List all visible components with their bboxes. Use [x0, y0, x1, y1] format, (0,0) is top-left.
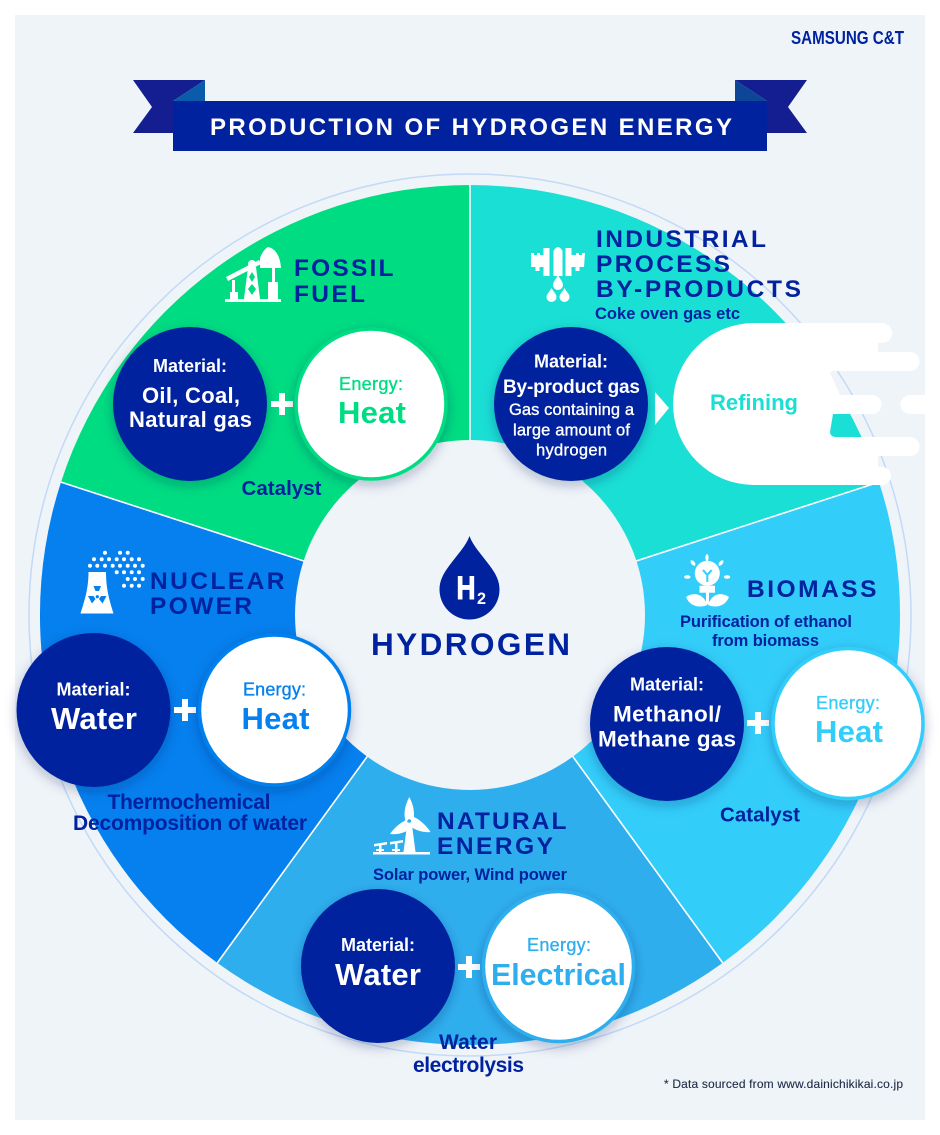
- label: catalyst: Catalyst: [720, 804, 800, 826]
- icon: oil pump: [225, 247, 281, 302]
- panel: natural energy sector: [217, 615, 723, 1045]
- panel: natural energy content: [301, 797, 634, 1077]
- heading: biomass: BIOMASS: [747, 576, 876, 603]
- material circle: Material:: [534, 352, 608, 372]
- icon: bulb and leaves: [684, 554, 730, 606]
- panel: natural energy content: ENERGY: [437, 833, 553, 860]
- heading: industrial process by-products: INDUSTRIAL: [596, 226, 766, 253]
- energy circle: Energy:: [339, 374, 403, 394]
- label: thermochemical decomposition: [73, 791, 307, 835]
- subtext: coke oven gas: Coke oven gas etc: [595, 305, 740, 323]
- label: water electrolysis: Water: [439, 1031, 497, 1054]
- material circle: Methanol/: [613, 702, 722, 726]
- source note: * Data sourced from www.dainichikikai.co.jp: [664, 1077, 903, 1091]
- heading: industrial process by-products: PROCESS: [596, 251, 730, 278]
- material circle: Material:: [153, 356, 227, 376]
- refining shape: [673, 323, 925, 485]
- icon: wind turbine: [373, 797, 430, 854]
- energy circle: Heat: [242, 701, 310, 736]
- material circle: [301, 889, 455, 1043]
- material circle: large amount of: [513, 422, 630, 440]
- subtext: purification: from biomass: [712, 632, 819, 650]
- material circle: By-product gas: [503, 377, 640, 398]
- material circle: Material:: [56, 680, 130, 700]
- icon: pipes and drops: [531, 247, 585, 302]
- subtext: purification: Purification of ethanol: [680, 613, 852, 631]
- panel: nuclear content: POWER: [150, 593, 252, 620]
- heading: natural energy: NATURAL: [437, 808, 567, 835]
- plus sign: [458, 956, 480, 978]
- plus sign: [271, 393, 293, 415]
- heading: nuclear power: NUCLEAR: [150, 568, 285, 595]
- title banner: [133, 80, 807, 151]
- panel: fossil fuel content: FUEL: [294, 281, 365, 308]
- heading: industrial process by-products: [596, 226, 801, 303]
- heading: fossil fuel: FOSSIL: [294, 255, 394, 282]
- label: water electrolysis: [413, 1031, 524, 1077]
- material circle: Natural gas: [129, 407, 252, 432]
- sector dividers: [61, 185, 879, 963]
- material circle: [494, 327, 648, 481]
- material circle: hydrogen: [536, 442, 607, 460]
- panel: nuclear content: [16, 551, 350, 835]
- energy circle: [296, 329, 446, 479]
- material circle: Gas containing a: [509, 401, 635, 419]
- arrow: [655, 392, 669, 425]
- energy circle: Energy:: [243, 680, 306, 700]
- material circle: Water: [51, 701, 137, 736]
- icon: hydrogen drop: H: [456, 570, 476, 606]
- energy circle: Heat: [815, 714, 883, 749]
- material circle: Methane gas: [598, 726, 736, 752]
- panel: fossil fuel content: [113, 247, 446, 500]
- material circle: [590, 647, 744, 801]
- subtext: solar and wind: Solar power, Wind power: [373, 866, 568, 884]
- material circle: Material:: [341, 935, 415, 955]
- energy circle: Heat: [338, 395, 406, 430]
- label: catalyst: Catalyst: [242, 477, 322, 500]
- panel: biomass sector: [470, 482, 900, 963]
- material circle: Oil, Coal,: [142, 383, 240, 408]
- material circle: Water: [335, 957, 421, 992]
- plus sign: [174, 699, 196, 721]
- panel: fossil fuel sector: [61, 185, 470, 615]
- panel: biomass content: [590, 554, 923, 826]
- material circle: Material:: [630, 674, 704, 694]
- panel: industrial content: [494, 226, 925, 485]
- plus sign: [747, 712, 769, 734]
- energy circle: [773, 648, 923, 798]
- energy circle: Electrical: [491, 957, 626, 992]
- energy circle: Energy:: [527, 935, 591, 955]
- icon: hydrogen drop: 2: [477, 589, 486, 608]
- panel: industrial process sector: [470, 185, 879, 615]
- material circle: [113, 327, 267, 481]
- material circle: [16, 633, 170, 787]
- heading: industrial process by-products: BY-PRODUCTS: [596, 276, 801, 303]
- energy circle: [484, 892, 634, 1042]
- subtext: purification: [680, 613, 852, 650]
- refining shape: Refining: [710, 390, 798, 415]
- label: thermochemical decomposition: Thermochemical: [108, 791, 270, 814]
- energy circle: [200, 635, 350, 785]
- center circle: [295, 440, 645, 790]
- label: water electrolysis: electrolysis: [413, 1054, 524, 1077]
- panel: nuclear power sector: [40, 482, 470, 963]
- title banner: PRODUCTION OF HYDROGEN ENERGY: [210, 114, 732, 141]
- brand logo: SAMSUNG C&T: [791, 28, 904, 48]
- heading: hydrogen: HYDROGEN: [371, 626, 570, 662]
- label: thermochemical decomposition: Decomposition of water: [73, 812, 307, 835]
- outer ring: [29, 174, 911, 1056]
- icon: cooling tower: [80, 551, 145, 614]
- icon: hydrogen drop: [440, 536, 500, 620]
- energy circle: Energy:: [816, 693, 880, 713]
